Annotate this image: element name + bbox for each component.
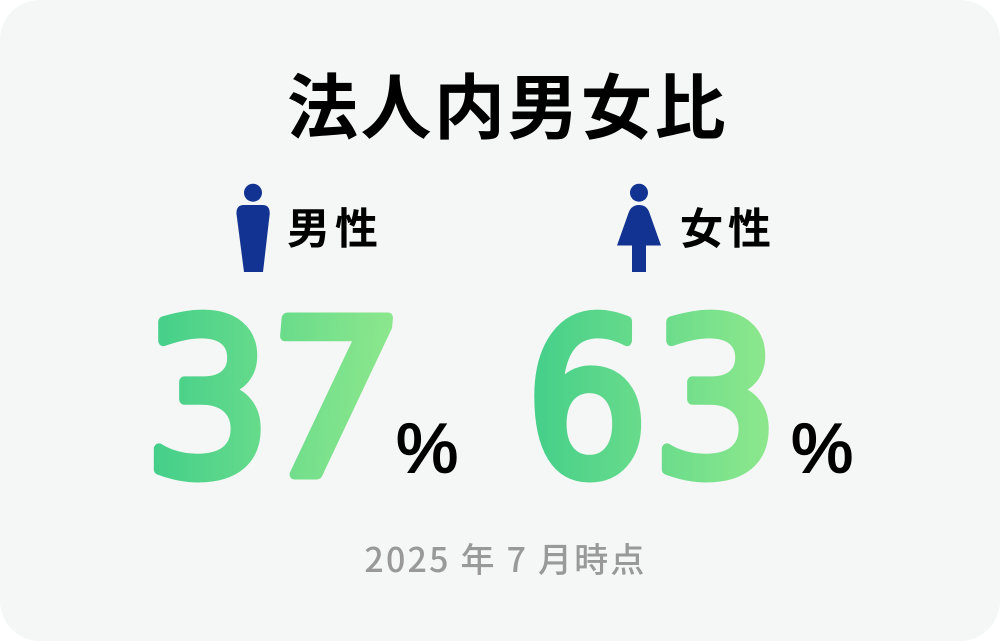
value: male 37 bbox=[144, 275, 409, 525]
icon: male figure bbox=[236, 184, 270, 272]
footnote date: 2025 年 7 月時点 bbox=[364, 533, 647, 582]
value: male 37: 3 bbox=[144, 275, 272, 524]
title: 法人内男女比 bbox=[287, 52, 728, 154]
percent sign: female: % bbox=[791, 409, 853, 487]
value: female 63: 6 bbox=[526, 276, 648, 526]
value: male 37: 7 bbox=[251, 275, 409, 525]
value: female 63 bbox=[526, 275, 780, 526]
value: female 63: 3 bbox=[652, 275, 780, 524]
label: male: 男性 bbox=[287, 195, 383, 257]
label: female: 女性 bbox=[680, 195, 776, 257]
percent sign: male: % bbox=[396, 409, 458, 487]
icon: female figure bbox=[617, 184, 661, 272]
